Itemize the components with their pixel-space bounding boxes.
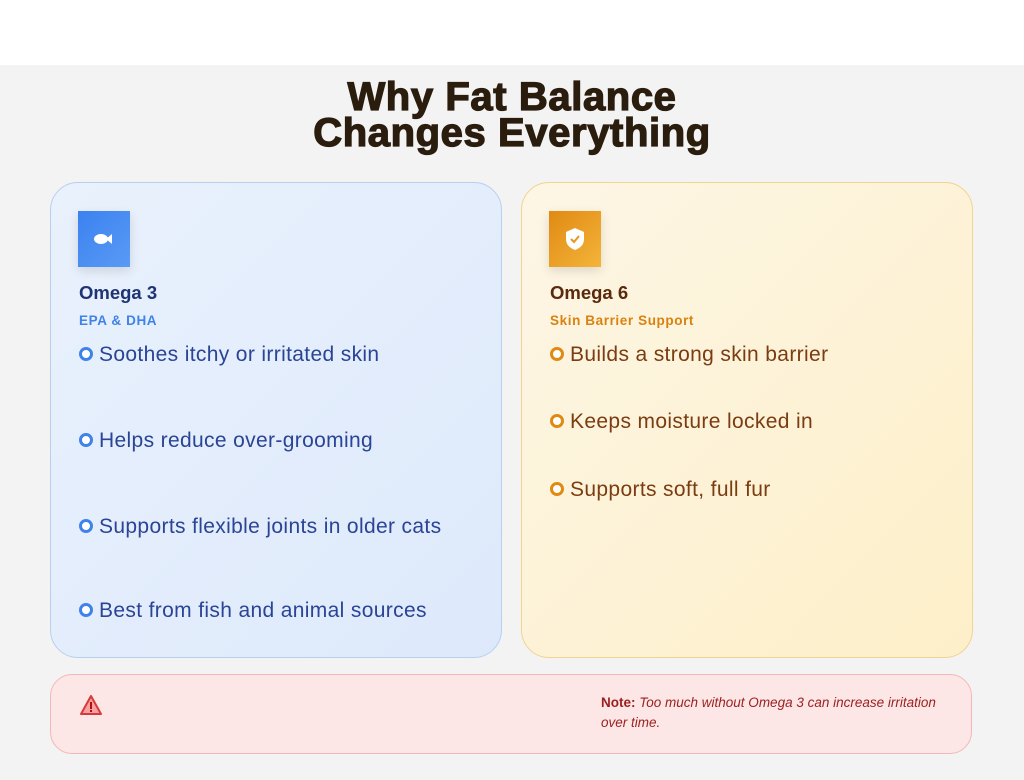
bullet: Best from fish and animal sources (99, 599, 427, 622)
bullet: Keeps moisture locked in (570, 410, 813, 433)
bullet: Builds a strong skin barrier (570, 343, 828, 366)
heading: Omega 3 (79, 282, 157, 303)
subtitle: Skin Barrier Support (550, 313, 694, 328)
callout: note (50, 674, 972, 754)
icon: fish (78, 211, 130, 267)
subtitle: EPA & DHA (79, 313, 157, 328)
icon: shield (549, 211, 601, 267)
title: Why Fat Balance (347, 75, 677, 119)
title (313, 75, 711, 156)
bullet: Supports soft, full fur (570, 478, 771, 501)
heading: Omega 6 (550, 282, 628, 303)
panel: omega 6 (521, 182, 973, 658)
bullet: Supports flexible joints in older cats (99, 515, 441, 538)
icon: warning (80, 695, 102, 715)
panel: omega 3 (50, 182, 502, 658)
note text: Note: Too much without Omega 3 can increase irritation over time. (601, 695, 936, 730)
bullet: Soothes itchy or irritated skin (99, 343, 379, 366)
bullet: Helps reduce over-grooming (99, 429, 373, 452)
title: Changes Everything (313, 111, 711, 155)
